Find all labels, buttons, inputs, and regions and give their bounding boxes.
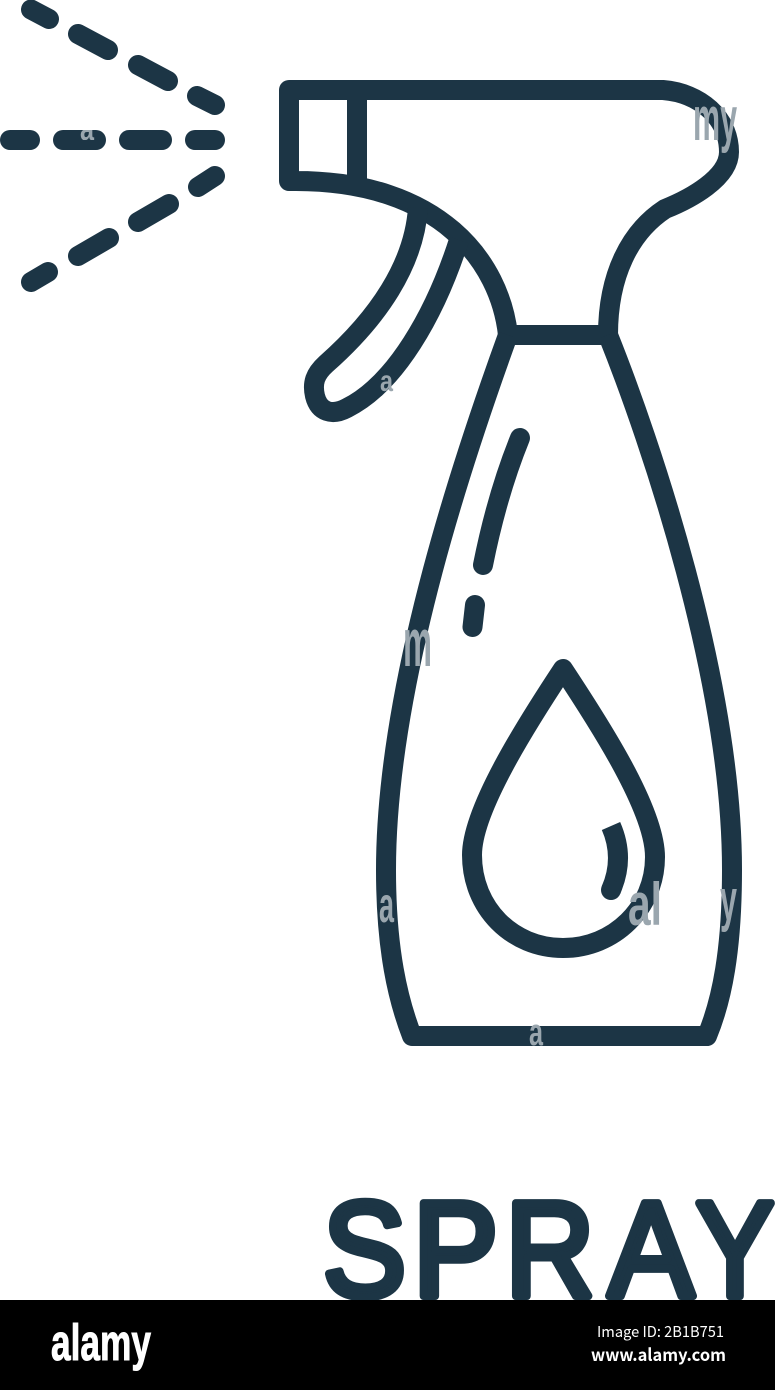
- title: SPRAY: [323, 1174, 774, 1325]
- icon: water drop: [472, 669, 655, 948]
- icon: bottle highlights: [472, 438, 520, 627]
- title: SPRAY: A: [608, 1174, 694, 1325]
- watermark fragments: a: [529, 1012, 544, 1054]
- image id: Image ID: 2B1B751: [597, 1321, 724, 1342]
- icon: spray bottle trigger head: [289, 90, 729, 335]
- icon: trigger lever: [314, 208, 459, 412]
- watermark fragments: [80, 85, 737, 1054]
- watermark fragments: m: [403, 605, 432, 681]
- logo: alamy: alamy: [51, 1314, 151, 1371]
- title: SPRAY: R: [506, 1174, 594, 1325]
- footer band: [0, 1300, 775, 1390]
- title: SPRAY: S: [323, 1174, 406, 1325]
- watermark fragments: al: [628, 871, 662, 938]
- title: SPRAY: P: [413, 1174, 498, 1325]
- watermark fragments: y: [720, 868, 737, 933]
- watermark fragments: a: [80, 111, 94, 147]
- icon: spray mist dashes: [10, 10, 215, 282]
- website: www.alamy.com: [591, 1341, 726, 1366]
- icon: bottle body: [386, 335, 732, 1036]
- watermark fragments: a: [380, 365, 393, 398]
- watermark fragments: a: [379, 877, 395, 933]
